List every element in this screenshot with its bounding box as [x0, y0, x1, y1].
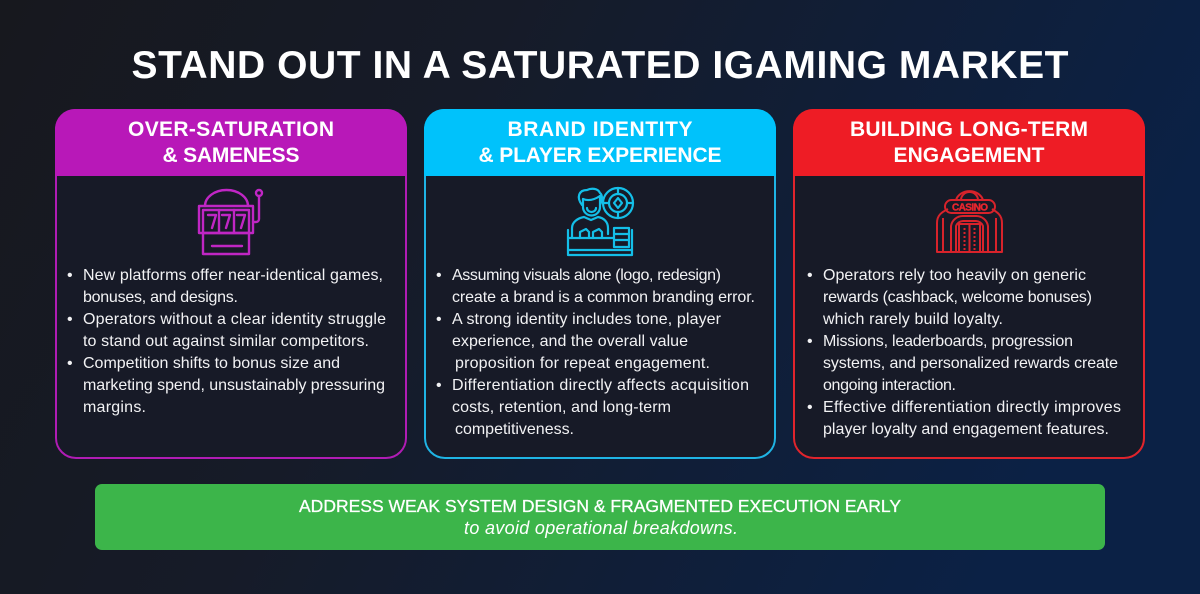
list: brand identity: • — [436, 311, 442, 328]
callout subtext: to avoid operational breakdowns. — [464, 518, 738, 538]
list: over-saturation: margins. — [83, 399, 146, 416]
heading: brand identity: & PLAYER EXPERIENCE — [478, 144, 722, 167]
list: long-term engagement: • — [807, 267, 813, 284]
list: over-saturation: Operators without a clear identity struggle — [83, 311, 386, 328]
list: brand identity: A strong identity includes tone, player — [452, 311, 722, 328]
callout banner — [95, 484, 1105, 550]
list: brand identity: • — [436, 267, 442, 284]
list: over-saturation: Competition shifts to bonus size and — [83, 355, 340, 372]
list: brand identity: Assuming visuals alone (logo, redesign) — [452, 267, 721, 284]
list: over-saturation: • — [67, 267, 73, 284]
heading: brand identity — [478, 118, 722, 167]
panel header: long-term engagement — [793, 109, 1145, 176]
list: long-term engagement: Missions, leaderboards, progression — [823, 333, 1073, 350]
list: over-saturation: to stand out against similar competitors. — [83, 333, 369, 350]
list: brand identity: competitiveness. — [455, 421, 574, 438]
heading: brand identity: BRAND IDENTITY — [508, 118, 692, 141]
panel header: brand identity — [424, 109, 776, 176]
list: brand identity: proposition for repeat engagement. — [455, 355, 710, 372]
icon label: casino: CASINO — [952, 202, 988, 214]
list: long-term engagement: which rarely build loyalty. — [822, 311, 1003, 328]
list: long-term engagement — [807, 267, 1121, 438]
list: brand identity: experience, and the overall value — [452, 333, 688, 350]
list: long-term engagement: systems, and personalized rewards create — [823, 355, 1118, 372]
callout heading: ADDRESS WEAK SYSTEM DESIGN & FRAGMENTED EXECUTION EARLY — [299, 496, 901, 516]
icon: slot machine — [199, 190, 262, 254]
heading: over-saturation: OVER-SATURATION — [128, 118, 334, 141]
panel: long-term engagement — [793, 109, 1145, 458]
list: brand identity: create a brand is a common branding error. — [452, 289, 755, 306]
list: long-term engagement: ongoing interaction. — [823, 377, 956, 394]
heading: long-term engagement — [850, 118, 1088, 167]
list: over-saturation: bonuses, and designs. — [83, 289, 238, 306]
list: over-saturation: • — [67, 355, 73, 372]
list: over-saturation: New platforms offer near-identical games, — [83, 267, 383, 284]
panel: over-saturation — [55, 109, 407, 458]
list: brand identity — [436, 267, 755, 438]
list: brand identity: costs, retention, and long-term — [452, 399, 671, 416]
heading: long-term engagement: ENGAGEMENT — [894, 144, 1045, 167]
icon: casino building — [937, 191, 1002, 252]
list: long-term engagement: player loyalty and engagement features. — [823, 421, 1109, 438]
heading: over-saturation: & SAMENESS — [162, 144, 300, 167]
list: over-saturation — [67, 267, 386, 416]
panel header: over-saturation — [55, 109, 407, 176]
list: over-saturation: • — [67, 311, 73, 328]
list: long-term engagement: • — [807, 399, 813, 416]
heading: long-term engagement: BUILDING LONG-TERM — [850, 118, 1088, 141]
list: long-term engagement: rewards (cashback, welcome bonuses) — [823, 289, 1092, 306]
list: brand identity: • — [436, 377, 442, 394]
list: long-term engagement: Operators rely too heavily on generic — [823, 267, 1086, 284]
list: over-saturation: marketing spend, unsustainably pressuring — [83, 377, 385, 394]
panel: brand identity — [424, 109, 776, 458]
title: STAND OUT IN A SATURATED IGAMING MARKET — [132, 44, 1069, 87]
list: long-term engagement: Effective differentiation directly improves — [823, 399, 1121, 416]
list: brand identity: Differentiation directly affects acquisition — [452, 377, 749, 394]
heading: over-saturation — [128, 118, 334, 167]
icon: dealer with chips — [568, 188, 633, 255]
list: long-term engagement: • — [807, 333, 813, 350]
